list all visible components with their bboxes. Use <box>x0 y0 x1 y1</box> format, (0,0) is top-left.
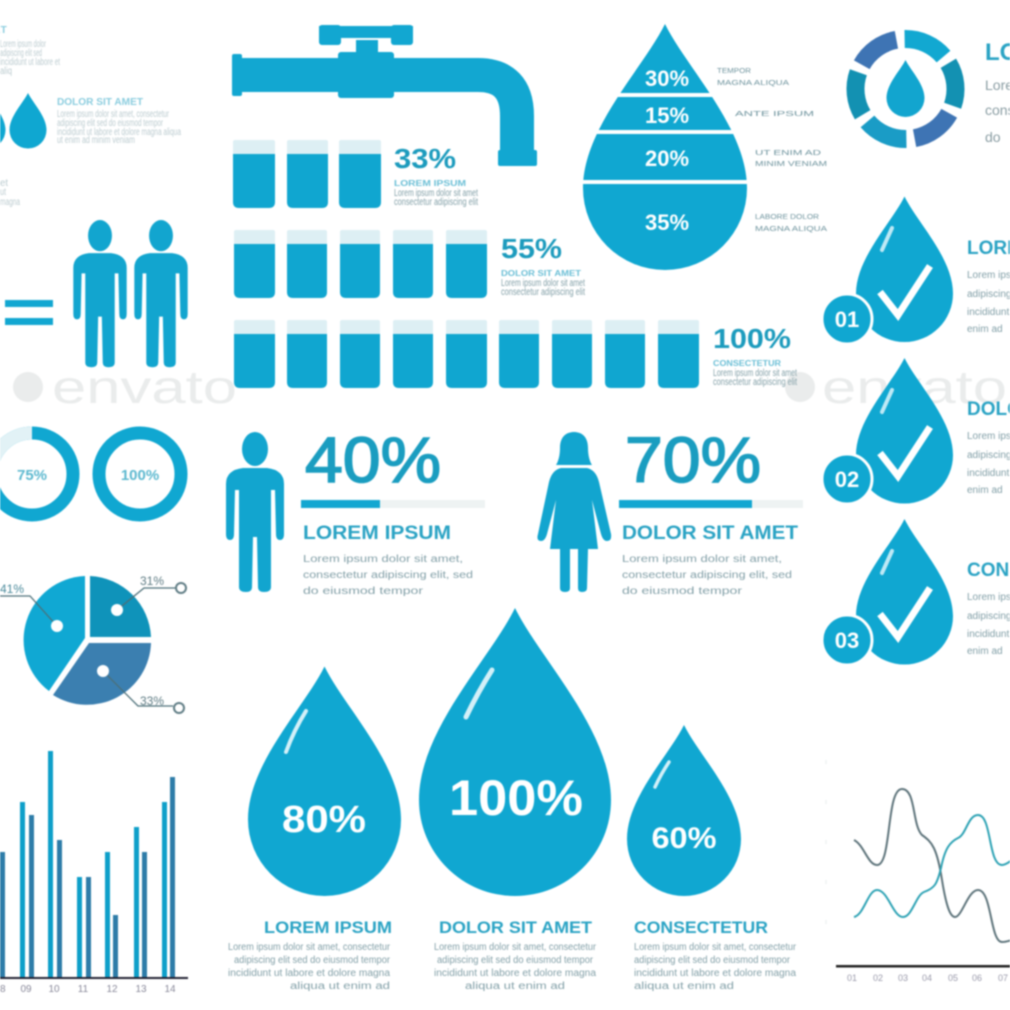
label: 33%: consectetur adipiscing elit <box>394 197 478 208</box>
caption: consectetur <box>634 918 797 992</box>
text fragment left: magna <box>0 197 20 208</box>
text fragment left: ut <box>0 187 6 198</box>
line chart: 07 <box>998 973 1008 983</box>
text block: dolor sit amet top left <box>57 97 181 146</box>
label: 33%: LOREM IPSUM <box>394 179 466 188</box>
drop 100% <box>419 608 611 896</box>
segmented water drop chart: 15% <box>645 103 689 128</box>
labels for segmented drop: LABORE DOLOR <box>755 214 819 221</box>
label: 55%: Lorem ipsum dolor sit amet <box>501 278 585 289</box>
text block: top right: do <box>985 129 1001 145</box>
text fragment left: et <box>0 178 8 189</box>
pie chart <box>0 574 186 713</box>
line chart: 02 <box>873 973 883 983</box>
labels for segmented drop: UT ENIM AD <box>755 150 821 157</box>
stat: 40% <box>301 424 485 597</box>
donut 100%: 100% <box>121 467 159 484</box>
text: lorem right <box>967 238 1010 335</box>
check drop 03 <box>822 519 953 665</box>
caption: lorem ipsum: Lorem ipsum dolor sit amet, consectetur <box>228 942 391 953</box>
line chart: 01 <box>847 973 857 983</box>
labels for segmented drop: MAGNA ALIQUA <box>717 80 789 87</box>
segmented water drop chart: 20% <box>645 146 689 171</box>
check drop 03: 03 <box>835 628 859 653</box>
text block: top left fragment: incididunt ut labore et <box>0 57 60 68</box>
icon: two people <box>73 220 188 367</box>
drop 100%: 100% <box>449 770 583 826</box>
bar chart: 10 <box>48 984 60 995</box>
row of glasses: 55% <box>234 230 487 298</box>
text: dolor right: incididunt <box>967 468 1009 479</box>
stat: 70% <box>619 424 803 597</box>
label: 55%: DOLOR SIT AMET <box>501 269 581 278</box>
check drop 01: 01 <box>835 307 859 332</box>
caption: lorem ipsum: incididunt ut labore et dolore magna <box>228 968 390 979</box>
segmented water drop chart <box>580 24 752 270</box>
line chart: 05 <box>948 973 958 983</box>
donut 75%: 75% <box>17 467 47 484</box>
caption: lorem ipsum: LOREM IPSUM <box>264 918 392 937</box>
drop 60%: 60% <box>652 822 716 855</box>
drop 80%: 80% <box>282 799 366 841</box>
stat: 40%: LOREM IPSUM <box>303 523 451 544</box>
bar chart: 13 <box>135 984 147 995</box>
text block: dolor sit amet top left: adipiscing elit sed do eiusmod tempor <box>57 118 163 129</box>
caption: consectetur: adipiscing elit sed do eiusmod tempor <box>634 955 791 966</box>
caption: consectetur: Lorem ipsum dolor sit amet, consectetur <box>634 942 797 953</box>
label: 100%: consectetur adipiscing elit <box>713 377 797 388</box>
stat: 70%: 70% <box>625 424 761 496</box>
segmented water drop chart: 30% <box>645 66 689 91</box>
watermark: envato left: envato <box>52 361 237 413</box>
caption: dolor sit amet: adipiscing elit sed do eiusmod tempor <box>437 955 594 966</box>
bar chart: 11 <box>78 984 89 995</box>
caption: consectetur: aliqua ut enim ad <box>634 981 734 992</box>
person: male 40% <box>226 432 284 592</box>
text block: dolor sit amet top left: incididunt ut labore et dolore magna aliqua <box>57 127 181 138</box>
row of glasses: 33% <box>233 140 381 208</box>
caption: dolor sit amet <box>434 918 597 992</box>
text block: top left fragment <box>0 25 60 77</box>
label: 33%: 33% <box>394 143 456 174</box>
labels for segmented drop: ANTE IPSUM <box>735 111 814 118</box>
pie chart: 31% <box>140 574 164 588</box>
text: lorem right: enim ad <box>967 324 1003 335</box>
segmented water drop chart: 35% <box>645 210 689 235</box>
check drop 01 <box>822 196 953 344</box>
bar chart: 14 <box>164 984 176 995</box>
check drop 02: 02 <box>835 467 859 492</box>
stat: 70%: do eiusmod tempor <box>622 586 743 597</box>
check drop 02 <box>822 358 953 504</box>
drop 80% <box>248 666 401 896</box>
text block: dolor sit amet top left: Lorem ipsum dolor sit amet, consectetur <box>57 109 169 120</box>
text block: dolor sit amet top left: ut enim ad minim veniam <box>57 135 135 146</box>
stat: 40%: do eiusmod tempor <box>303 586 424 597</box>
labels for segmented drop: TEMPOR <box>717 68 751 75</box>
line chart: 06 <box>972 973 982 983</box>
labels for segmented drop: MAGNA ALIQUA <box>755 226 827 233</box>
caption: dolor sit amet: DOLOR SIT AMET <box>439 918 593 937</box>
stat: 70%: DOLOR SIT AMET <box>622 523 798 544</box>
line chart: 04 <box>922 973 932 983</box>
stat: 40%: consectetur adipiscing elit, sed <box>303 570 473 581</box>
label: 100% <box>713 323 797 388</box>
donut 100% <box>99 433 181 515</box>
label: 33% <box>394 143 478 208</box>
caption: dolor sit amet: aliqua ut enim ad <box>465 981 565 992</box>
watermark: envato left <box>13 361 237 413</box>
text: consectetur right <box>967 560 1010 657</box>
label: 55% <box>501 233 585 298</box>
caption: dolor sit amet: Lorem ipsum dolor sit amet, consectetur <box>434 942 597 953</box>
caption: lorem ipsum: adipiscing elit sed do eiusmod tempor <box>234 955 391 966</box>
pie chart: 41% <box>0 582 24 596</box>
equals sign <box>5 300 53 325</box>
text: consectetur right: incididunt <box>967 629 1009 640</box>
watermark: envato right: envato <box>822 361 1007 413</box>
label: 100%: CONSECTETUR <box>713 359 781 368</box>
label: 55%: consectetur adipiscing elit <box>501 287 585 298</box>
label: 100%: 100% <box>713 323 791 354</box>
text block: top left fragment: aliq <box>0 66 12 77</box>
labels for segmented drop: MINIM VENIAM <box>755 161 827 168</box>
drop 60% <box>627 725 741 896</box>
caption: lorem ipsum <box>228 918 392 992</box>
bar chart: 12 <box>106 984 118 995</box>
stat: 70%: Lorem ipsum dolor sit amet, <box>622 554 782 565</box>
text fragment left <box>0 178 20 208</box>
caption: lorem ipsum: aliqua ut enim ad <box>290 981 390 992</box>
caption: dolor sit amet: incididunt ut labore et dolore magna <box>434 968 596 979</box>
stat: 40%: Lorem ipsum dolor sit amet, <box>303 554 463 565</box>
caption: consectetur: incididunt ut labore et dolore magna <box>634 968 796 979</box>
bar chart <box>0 751 188 995</box>
labels for segmented drop <box>717 68 827 233</box>
line chart <box>826 760 1010 983</box>
donut 75% <box>0 433 73 515</box>
person: female 70% <box>537 432 611 592</box>
label: 100%: Lorem ipsum dolor sit amet <box>713 368 797 379</box>
stat: 40%: 40% <box>305 424 441 496</box>
row of glasses: 100% <box>234 320 699 388</box>
text: consectetur right: enim ad <box>967 646 1003 657</box>
text block: top right <box>985 39 1010 145</box>
label: 33%: Lorem ipsum dolor sit amet <box>394 188 478 199</box>
pie chart: 33% <box>140 694 164 708</box>
text block: dolor sit amet top left: DOLOR SIT AMET <box>57 97 143 108</box>
icon: small drops left <box>0 93 46 148</box>
icon: faucet <box>232 25 537 166</box>
text block: top left fragment: adipiscing elit sed <box>0 48 42 59</box>
line chart: 03 <box>898 973 908 983</box>
caption: consectetur: CONSECTETUR <box>634 918 768 937</box>
text: lorem right: incididunt <box>967 307 1009 318</box>
label: 55%: 55% <box>501 233 562 264</box>
text block: top left fragment: Lorem ipsum dolor <box>0 39 46 50</box>
ring chart with drop <box>837 20 974 158</box>
text: dolor right <box>967 399 1010 496</box>
stat: 70%: consectetur adipiscing elit, sed <box>622 570 792 581</box>
watermark: envato right <box>785 361 1007 413</box>
text: dolor right: enim ad <box>967 485 1003 496</box>
bar chart: 09 <box>20 984 32 995</box>
